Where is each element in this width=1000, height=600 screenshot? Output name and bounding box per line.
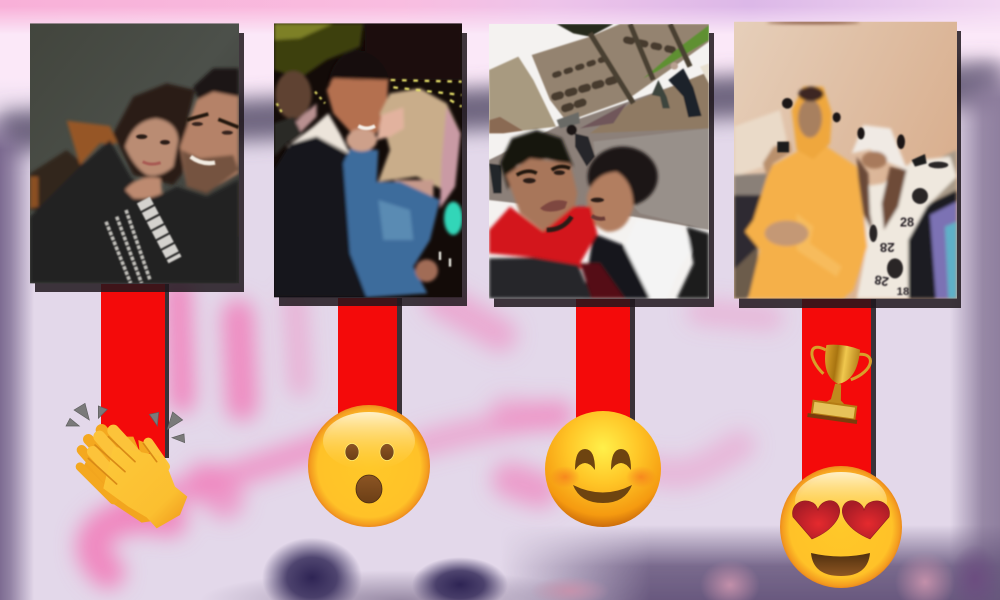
- photo 2: couple kissing at night: [274, 23, 467, 306]
- photo 4: couple in animal onesies: [734, 21, 961, 308]
- connector bar 4: [802, 299, 876, 481]
- photo 4: couple in animal onesies: 28: [880, 240, 895, 255]
- photo 4: couple in animal onesies: 28: [900, 216, 914, 230]
- icon: smiling face: [545, 411, 661, 527]
- photo 4: couple in animal onesies: 28: [874, 272, 890, 289]
- photo 4: couple in animal onesies: 18: [897, 286, 909, 298]
- connector bar 3: [576, 299, 635, 421]
- photo 3: selfie at the Colosseum: [489, 24, 714, 307]
- connector bar 2: [338, 298, 402, 418]
- icon: trophy: [803, 341, 872, 425]
- icon: surprised face: [308, 405, 430, 527]
- icon: heart eyes face: [780, 466, 902, 588]
- icon: clapping hands: [66, 403, 187, 528]
- photo 1: couple on a sofa: [30, 23, 244, 292]
- connector bar 1: [101, 284, 169, 458]
